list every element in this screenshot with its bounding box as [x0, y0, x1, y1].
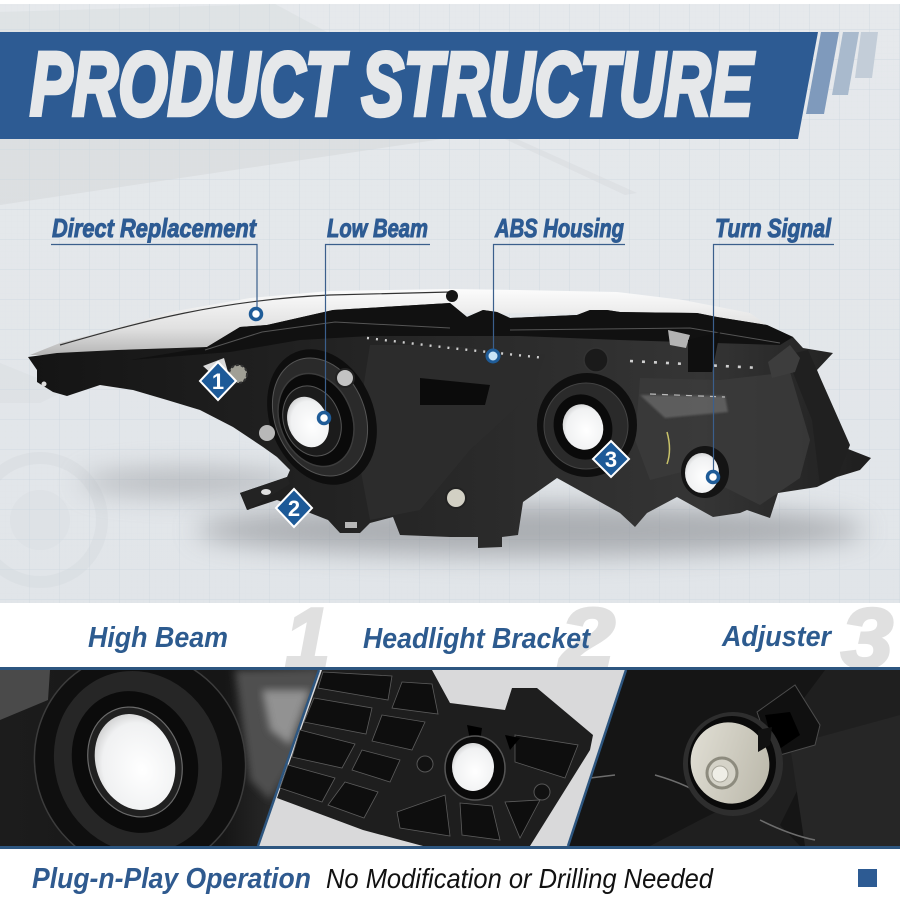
callout: low beam: Low Beam: [327, 213, 428, 243]
headlight assembly: [28, 289, 871, 548]
callout: direct replacement: Direct Replacement: [52, 213, 257, 243]
wiring mark: [667, 432, 670, 464]
bolts: [42, 290, 608, 508]
callout: turn signal: [708, 213, 834, 482]
photo panel: high beam: [0, 670, 318, 846]
upper black band: [130, 303, 793, 360]
white caption strip: [0, 603, 900, 667]
callout: low beam: [318, 213, 430, 424]
callout: ABS housing: ABS Housing: [494, 213, 624, 243]
photo panel: adjuster: [568, 670, 900, 846]
footer description text: No Modification or Drilling Needed: [326, 863, 714, 894]
marker 1: 1: [212, 369, 224, 394]
large number 3: 3: [841, 591, 893, 685]
photo panel frame: [0, 668, 900, 848]
photo panel: headlight bracket: [258, 670, 628, 846]
chrome strip: [30, 289, 767, 355]
large number 1: 1: [285, 591, 330, 685]
marker 3: 3: [605, 447, 617, 472]
housing body: [28, 303, 871, 548]
adjuster gear: [203, 358, 247, 383]
marker 3: [593, 441, 629, 477]
title banner: [0, 32, 818, 139]
background grid panel: [0, 0, 900, 603]
marker 2: [276, 489, 312, 527]
turn signal socket: [681, 446, 729, 498]
dotted rib rows: [367, 338, 545, 358]
lighter shell right: [635, 372, 810, 505]
callout: direct replacement: [51, 213, 262, 320]
lower bracket tab: [240, 477, 357, 528]
metal clip: [668, 330, 690, 348]
rear vent panel: [786, 350, 850, 485]
footer highlight text: Plug-n-Play Operation: [32, 863, 311, 895]
marker 1: [200, 362, 236, 400]
large number 2: 2: [558, 591, 615, 685]
caption: adjuster: Adjuster: [721, 621, 833, 653]
caption: headlight bracket: Headlight Bracket: [363, 623, 591, 655]
high beam socket: [537, 373, 637, 477]
callout: ABS housing: [487, 213, 625, 362]
caption: high beam: High Beam: [88, 622, 228, 654]
marker 2: 2: [288, 496, 300, 521]
footer square marker: [858, 869, 877, 887]
headlight shadows: [80, 468, 865, 556]
decorative banner stripes: [806, 32, 878, 114]
low beam socket: [248, 333, 396, 501]
callout: turn signal: Turn Signal: [715, 213, 832, 243]
